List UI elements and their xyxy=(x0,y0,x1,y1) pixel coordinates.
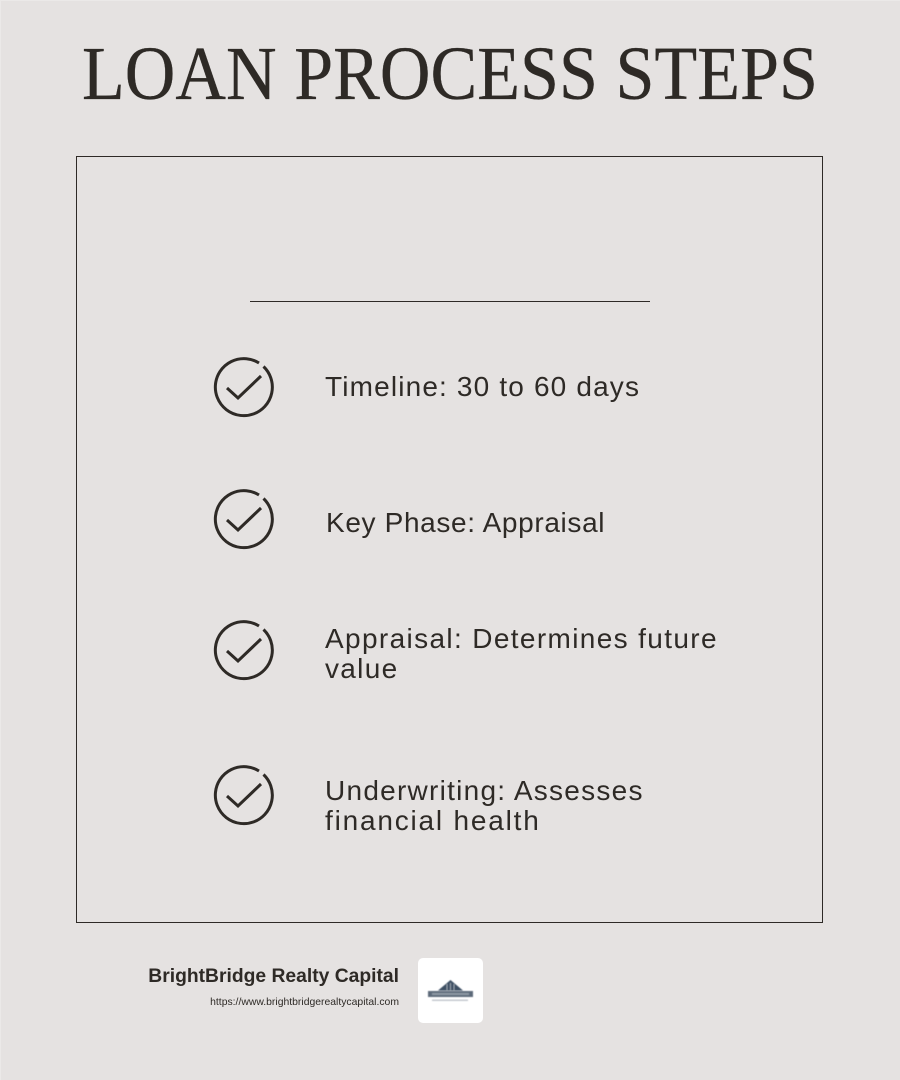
text: underwriting: financial health xyxy=(325,805,541,836)
brand url: https://www.brightbridgerealtycapital.com xyxy=(210,997,399,1008)
text: key phase: Key Phase: Appraisal xyxy=(326,507,605,538)
icon: check circle 3 xyxy=(214,620,274,680)
text: underwriting xyxy=(325,775,644,836)
logo tile xyxy=(418,958,483,1023)
text: timeline: Timeline: 30 to 60 days xyxy=(325,371,640,402)
icon: check circle 1 xyxy=(214,357,274,418)
text: appraisal: value xyxy=(325,653,398,684)
panel: steps frame xyxy=(76,156,823,923)
brand name: BrightBridge Realty Capital xyxy=(148,966,399,987)
icon: logo mark xyxy=(427,980,474,1002)
icon: check circle 4 xyxy=(214,765,274,826)
icon: check circle 2 xyxy=(214,489,274,550)
text: appraisal: Appraisal: Determines future xyxy=(325,623,718,654)
text: appraisal xyxy=(325,623,718,684)
divider line xyxy=(250,301,650,302)
text: underwriting: Underwriting: Assesses xyxy=(325,775,644,806)
title: LOAN PROCESS STEPS xyxy=(82,32,818,116)
